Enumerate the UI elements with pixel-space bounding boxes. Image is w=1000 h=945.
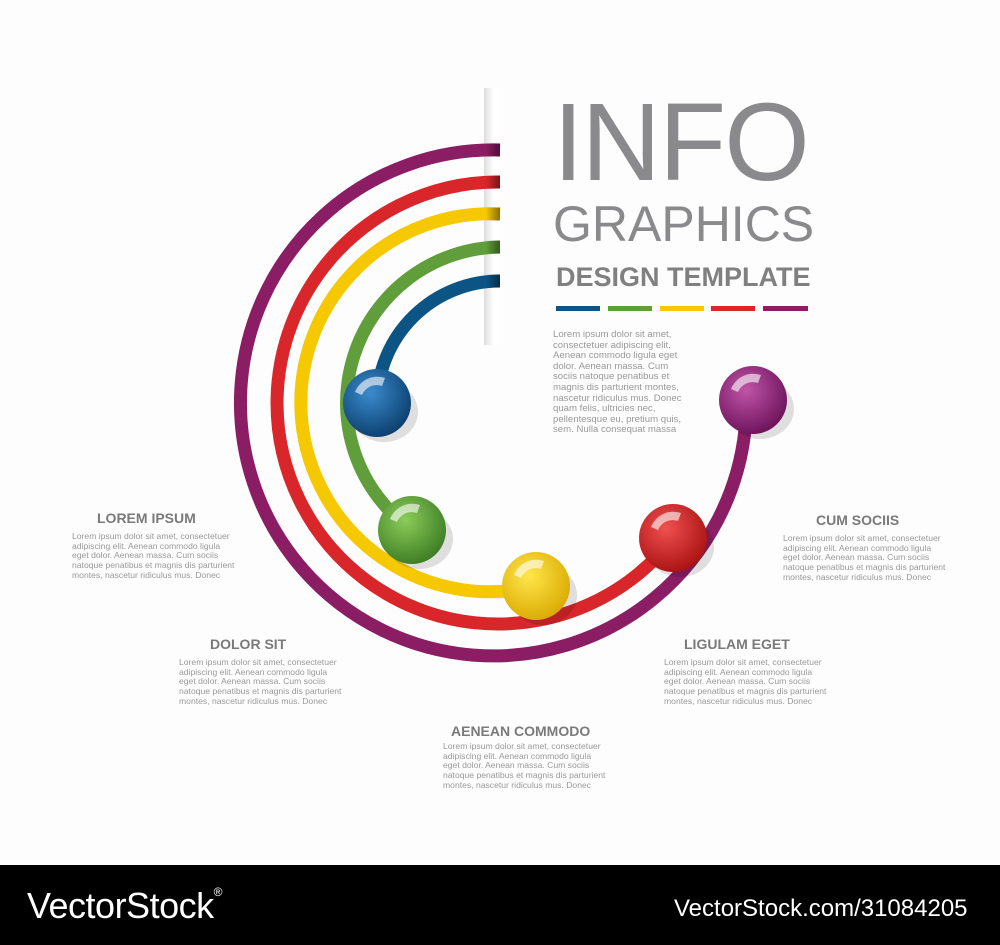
block: DOLOR SIT: Lorem ipsum dolor sit amet, consectetuer	[179, 657, 337, 667]
sphere: blue	[343, 369, 418, 442]
title: DESIGN TEMPLATE: DESIGN TEMPLATE	[556, 262, 811, 292]
block: AENEAN COMMODO	[443, 723, 606, 790]
block: CUM SOCIIS	[783, 512, 946, 582]
arc: yellow	[301, 208, 536, 592]
block: AENEAN COMMODO: Lorem ipsum dolor sit amet, consectetuer	[443, 741, 601, 751]
block: CUM SOCIIS: eget dolor. Aenean massa. Cum sociis	[783, 552, 929, 562]
block: LIGULAM EGET: LIGULAM EGET	[684, 636, 790, 652]
sphere: green	[378, 496, 453, 569]
block: DOLOR SIT: adipiscing elit. Aenean commodo ligula	[179, 667, 327, 677]
block: AENEAN COMMODO: eget dolor. Aenean massa. Cum sociis	[443, 760, 589, 770]
color legend lines	[556, 306, 808, 311]
block: AENEAN COMMODO: adipiscing elit. Aenean commodo ligula	[443, 751, 591, 761]
footer url: VectorStock.com/31084205	[674, 895, 968, 922]
block: LOREM IPSUM: Lorem ipsum dolor sit amet, consectetuer	[72, 531, 230, 541]
arc: purple	[240, 144, 753, 656]
white bar	[484, 88, 500, 345]
block: CUM SOCIIS: CUM SOCIIS	[816, 512, 899, 528]
block: LIGULAM EGET: adipiscing elit. Aenean commodo ligula	[664, 667, 812, 677]
block: LOREM IPSUM: montes, nascetur ridiculus mus. Donec	[72, 570, 220, 580]
block: CUM SOCIIS: natoque penatibus et magnis dis parturient	[783, 562, 945, 572]
block: DOLOR SIT: DOLOR SIT	[210, 636, 286, 652]
block: LOREM IPSUM: natoque penatibus et magnis dis parturient	[72, 560, 234, 570]
block: CUM SOCIIS: Lorem ipsum dolor sit amet, consectetuer	[783, 533, 941, 543]
block: AENEAN COMMODO: AENEAN COMMODO	[451, 723, 590, 739]
block: CUM SOCIIS: adipiscing elit. Aenean commodo ligula	[783, 543, 931, 553]
title: GRAPHICS: GRAPHICS	[553, 196, 814, 252]
block: DOLOR SIT: montes, nascetur ridiculus mus. Donec	[179, 696, 327, 706]
arc: green	[347, 240, 500, 530]
block: AENEAN COMMODO: natoque penatibus et magnis dis parturient	[443, 770, 605, 780]
block: LOREM IPSUM: eget dolor. Aenean massa. Cum sociis	[72, 550, 218, 560]
intro text: Lorem ipsum dolor sit amet, consectetuer adipiscing elit. Aenean commodo ligula eget dolor. Aenean massa. Cum sociis natoque penatibus et magnis dis parturient montes, nascetur ridiculus mus. Donec quam felis, ultricies nec, pellentesque eu, pretium quis, sem. Nulla consequat massa	[553, 329, 682, 435]
arc: blue	[377, 274, 500, 403]
block: DOLOR SIT: natoque penatibus et magnis dis parturient	[179, 686, 341, 696]
block: DOLOR SIT	[179, 636, 342, 706]
block: LIGULAM EGET: natoque penatibus et magnis dis parturient	[664, 686, 826, 696]
block: LOREM IPSUM	[72, 510, 234, 580]
block: CUM SOCIIS: montes, nascetur ridiculus mus. Donec	[783, 572, 931, 582]
block: LIGULAM EGET: eget dolor. Aenean massa. Cum sociis	[664, 676, 810, 686]
footer logo: VectorStock®	[27, 885, 222, 926]
block: LOREM IPSUM: LOREM IPSUM	[97, 510, 196, 526]
sphere: red	[639, 504, 714, 577]
block: LIGULAM EGET: Lorem ipsum dolor sit amet, consectetuer	[664, 657, 822, 667]
block: DOLOR SIT: eget dolor. Aenean massa. Cum sociis	[179, 676, 325, 686]
arc: red	[277, 176, 673, 624]
block: LIGULAM EGET	[664, 636, 826, 706]
sphere: yellow	[502, 552, 577, 625]
title: INFO: INFO	[553, 81, 808, 204]
sphere: purple	[719, 366, 794, 439]
block: LIGULAM EGET: montes, nascetur ridiculus mus. Donec	[664, 696, 812, 706]
footer bar	[0, 865, 1000, 945]
block: LOREM IPSUM: adipiscing elit. Aenean commodo ligula	[72, 541, 220, 551]
block: AENEAN COMMODO: montes, nascetur ridiculus mus. Donec	[443, 780, 591, 790]
